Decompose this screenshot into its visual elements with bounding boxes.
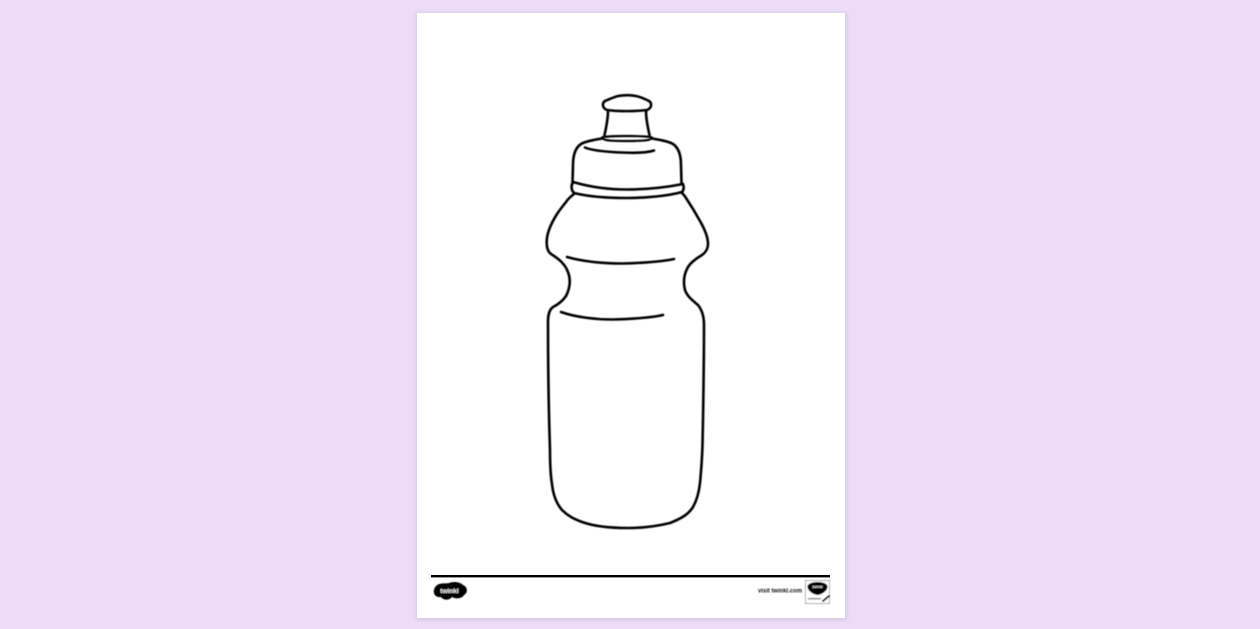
bottle neck xyxy=(604,111,650,135)
footer rule xyxy=(431,575,830,577)
body crease xyxy=(561,312,663,320)
twinkl logo xyxy=(434,582,467,600)
licence badge xyxy=(806,580,830,604)
footer url text: visit twinkl.com xyxy=(758,588,802,594)
twinkl logo: twinkl xyxy=(440,588,459,595)
cap band xyxy=(572,182,684,198)
licence badge: twinkl xyxy=(812,585,823,589)
icon: water bottle xyxy=(547,95,708,528)
shoulder crease xyxy=(567,257,674,264)
bottle cap top xyxy=(603,95,651,111)
neck collar xyxy=(602,136,652,141)
cap dome xyxy=(572,138,682,183)
cap highlight xyxy=(585,148,654,153)
page shadow xyxy=(416,13,847,620)
bottle body outline xyxy=(547,193,708,528)
worksheet page xyxy=(417,13,845,618)
